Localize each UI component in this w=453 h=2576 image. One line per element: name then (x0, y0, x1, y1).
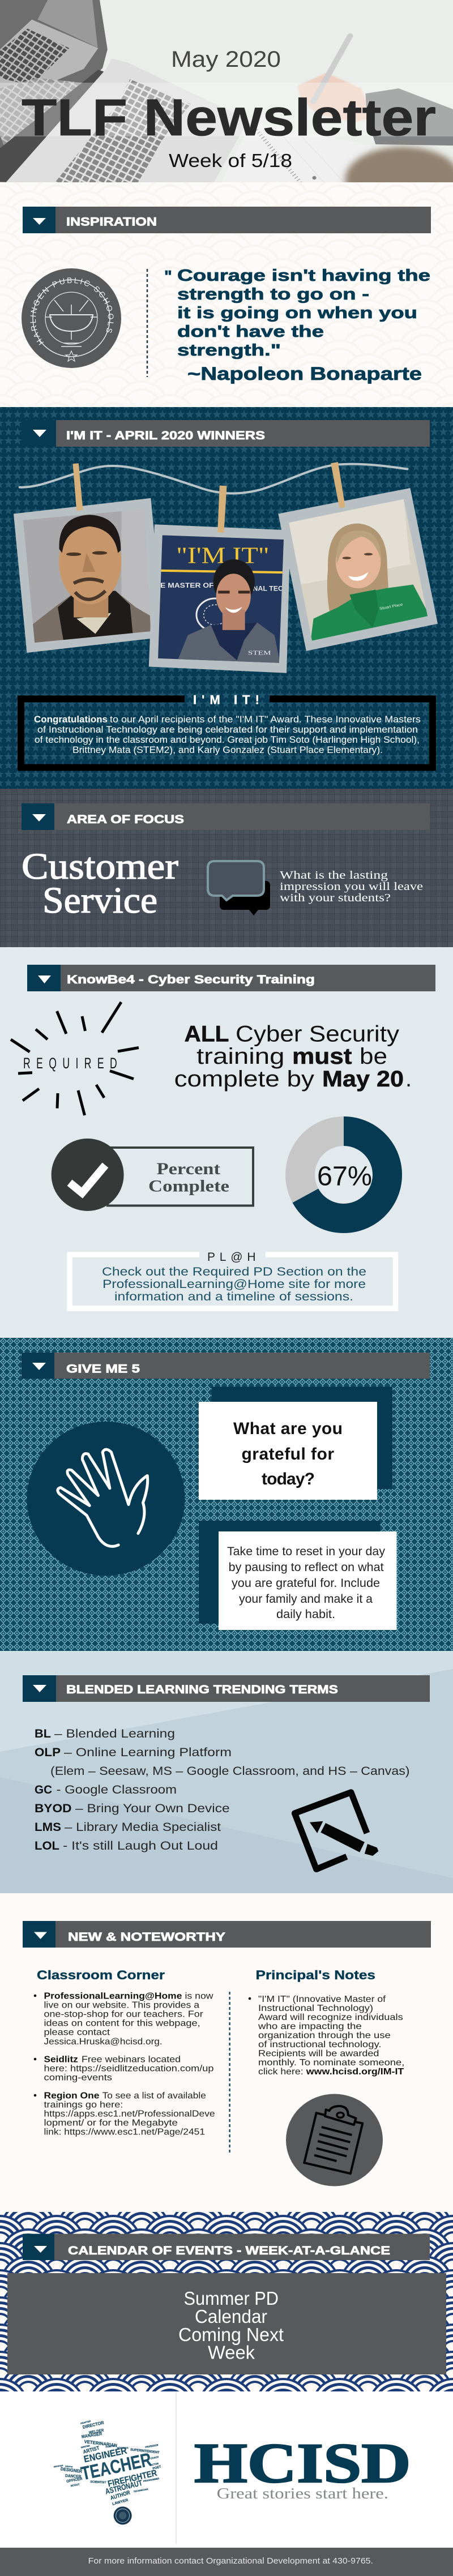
panel: area of focus (0, 789, 453, 947)
section heading: area of focus: AREA OF FOCUS (67, 813, 184, 826)
Texas word cloud: WRITER (81, 2445, 91, 2449)
bullet list: please contact (44, 2028, 110, 2038)
bullet list: https://apps.esc1.net/ProfessionalDeve (44, 2109, 215, 2119)
deadline statement: must (292, 1044, 352, 1069)
glossary list: (Elem – Seesaw, MS – Google Classroom, and HS – Canvas) (50, 1765, 410, 1778)
bullet list: is now (185, 1991, 213, 2001)
glossary list: LMS (35, 1821, 61, 1834)
glossary list: – Blended Learning (54, 1727, 175, 1740)
Texas word cloud: ASTRONAUT (104, 2478, 143, 2496)
quote: strength." (177, 341, 281, 360)
callout body: Congratulations (34, 714, 108, 725)
quote: don't have the (177, 323, 324, 341)
divider (147, 269, 148, 377)
deadline statement: be (360, 1044, 387, 1069)
Texas word cloud: COACH (150, 2455, 159, 2460)
Texas word cloud: ACTOR (150, 2462, 159, 2467)
section heading: area of focus (22, 803, 430, 830)
bullet list: link: https://www.esc1.net/Page/2451 (44, 2128, 205, 2137)
calendar message box: Week (208, 2342, 255, 2363)
callout: PL@H: information and a timeline of sessions. (114, 1290, 353, 1303)
callout: I'M IT award text (21, 693, 433, 768)
quote: it is going on when you (177, 304, 417, 322)
deadline statement: ALL (185, 1021, 229, 1046)
bullet list: lopment/ or for the Megabyte (44, 2119, 178, 2128)
glossary list: GC (35, 1783, 52, 1796)
callout body: of Instructional Technology are being celebrated for their support and implementation (37, 724, 418, 735)
card: gratitude advice: by pausing to reflect on what (229, 1561, 384, 1574)
Texas word cloud: SURVEYOR (65, 2465, 73, 2468)
Texas word cloud: DIRECTOR (82, 2420, 105, 2430)
focus title: Customer (22, 846, 178, 887)
Texas word cloud: LAWYER (112, 2498, 129, 2506)
note text: of instructional technology. (258, 2040, 382, 2049)
section heading: new and noteworthy (23, 1921, 431, 1948)
divider (176, 2391, 177, 2544)
deadline statement: training (196, 1044, 284, 1069)
bullet list: ProfessionalLearning@Home (44, 1991, 182, 2001)
deadline statement: complete by (174, 1067, 314, 1092)
callout body: of technology in the classroom and beyond. Great job Tim Soto (Harlingen High School), (35, 734, 420, 745)
translucent band (0, 83, 453, 136)
photo: Brittney Mata: STEM (248, 650, 271, 656)
card: gratitude advice: you are grateful for. Include (232, 1577, 380, 1590)
section heading: give me 5 (22, 1353, 430, 1379)
calendar message box: Summer PD (183, 2288, 279, 2309)
panel: calendar of events (0, 2212, 453, 2391)
bullet list: here: https://seidlitzeducation.com/up (44, 2064, 214, 2074)
bullet list: Seidlitz (44, 2055, 78, 2064)
card: gratitude question (199, 1387, 392, 1500)
note text: www.hcisd.org/IM-IT (306, 2067, 404, 2077)
date line: May 2020 (171, 47, 281, 72)
Texas word cloud: PROGRAMMER (143, 2477, 159, 2483)
photo: Brittney Mata: "I'M IT" (176, 542, 270, 568)
card: gratitude advice: your family and make it a (239, 1593, 373, 1606)
icon: hand (27, 1422, 185, 1576)
calendar message box: Calendar (195, 2306, 267, 2327)
callout body (34, 714, 421, 755)
panel: I'm IT April 2020 winners (0, 407, 453, 789)
photo: Tim Soto (14, 463, 164, 653)
glossary list: LOL (35, 1839, 59, 1852)
section heading: I'm IT (23, 420, 430, 447)
panel: give me 5 (0, 1338, 453, 1651)
glossary list: OLP (35, 1746, 61, 1759)
header photo banner (0, 0, 453, 182)
footer contact bar: For more information contact Organizational Development at 430-9765. (88, 2556, 373, 2566)
deadline statement (174, 1021, 412, 1092)
glossary list (35, 1727, 410, 1852)
required burst (11, 1002, 139, 1115)
required burst: REQUIRED (23, 1054, 117, 1072)
percent complete label (52, 1139, 253, 1211)
HCISD logo: HCISD (194, 2432, 411, 2494)
Texas word cloud: DANCER (65, 2473, 82, 2479)
callout body: Brittney Mata (STEM2), and Karly Gonzalez (Stuart Place Elementary). (72, 744, 383, 755)
callout: PL@H: Check out the Required PD Section on the (102, 1265, 366, 1278)
column: classroom corner: Classroom Corner (37, 1968, 165, 1982)
section heading: KnowBe4 (27, 965, 435, 991)
column: principal's notes (249, 1968, 404, 2077)
quote: Courage isn't having the (177, 267, 430, 285)
glossary list: - It's still Laugh Out Loud (63, 1839, 218, 1852)
bullet list (34, 1991, 215, 2137)
bullet list: Jessica.Hruska@hcisd.org. (44, 2037, 163, 2047)
Texas word cloud: POET (152, 2465, 162, 2471)
bullet list: coming-events (44, 2073, 112, 2083)
Texas word cloud: ENGINEER (83, 2445, 128, 2464)
quote: ~Napoleon Bonaparte (187, 363, 422, 384)
note text: "I'M IT" (Innovative Master of (258, 1995, 386, 2004)
photo: Brittney Mata: E MASTER OF I (160, 582, 218, 589)
Texas word cloud: PRAFTER (80, 2420, 91, 2425)
Texas word cloud: VETERINARIAN (84, 2439, 118, 2448)
section heading: I'm IT: I'M IT - APRIL 2020 WINNERS (66, 429, 265, 442)
focus question: What is the lasting (280, 869, 388, 882)
panel: KnowBe4 cyber security training (0, 947, 453, 1338)
deadline statement: May 20 (322, 1067, 404, 1092)
glossary list: – Online Learning Platform (64, 1746, 232, 1759)
panel: new and noteworthy (0, 1893, 453, 2212)
glossary list: BYOD (35, 1802, 71, 1815)
Texas word cloud: ENTREPRENEUR (117, 2447, 129, 2449)
donut chart: 67 percent: 67% (317, 1162, 372, 1192)
Texas word cloud: DESIGNER (60, 2466, 83, 2474)
callout heading: I'M IT! (193, 693, 259, 707)
Texas word cloud: AUTHOR (110, 2489, 131, 2502)
bullet list: ideas on content for this webpage, (44, 2019, 200, 2029)
section heading: blended learning: BLENDED LEARNING TRENDING TERMS (66, 1683, 338, 1696)
bullet list: Free webinars located (82, 2055, 181, 2064)
Texas word cloud: FIREFIGHTER (107, 2468, 158, 2489)
card: gratitude advice (199, 1521, 396, 1630)
glossary list: BL (35, 1727, 51, 1740)
focus title: Service (42, 880, 157, 921)
card: gratitude question: grateful for (241, 1445, 334, 1464)
glossary list: - Google Classroom (57, 1783, 177, 1796)
Texas word cloud: PROFESSOR (145, 2444, 159, 2449)
note text: organization through the use (258, 2031, 391, 2040)
icon: pencil in square (294, 1792, 378, 1869)
card: gratitude advice: Take time to reset in your day (227, 1545, 386, 1558)
section heading: give me 5: GIVE ME 5 (66, 1363, 140, 1376)
focus title (22, 846, 178, 921)
bullet list: live on our website. This provides a (44, 2001, 199, 2010)
week line: Week of 5/18 (169, 150, 292, 171)
panel: inspiration (0, 182, 453, 407)
note text: Instructional Technology) (258, 2004, 373, 2013)
card: gratitude question: What are you (233, 1419, 343, 1438)
Texas word cloud: ARTIST (83, 2445, 100, 2455)
clothespin (331, 462, 345, 508)
section heading: calendar: CALENDAR OF EVENTS - WEEK-AT-A-GLANCE (68, 2244, 390, 2257)
column: principal's notes: Principal's Notes (256, 1968, 375, 1982)
focus question: impression you will leave (280, 880, 423, 893)
icon: small district seal (114, 2506, 132, 2524)
card: gratitude question: today? (262, 1470, 315, 1488)
section heading: inspiration: INSPIRATION (66, 215, 157, 229)
photo: Karly Gonzalez: Stuart Place (379, 602, 403, 611)
callout: PL@H: ProfessionalLearning@Home site for more (102, 1278, 366, 1291)
Texas word cloud: SUPERINTENDENT (130, 2448, 160, 2455)
photo clothesline and portraits (14, 462, 438, 673)
section heading: calendar (23, 2234, 430, 2260)
Texas word cloud (54, 2420, 162, 2524)
bullet list: Region One (44, 2091, 100, 2100)
callout: PL@H (70, 1251, 395, 1308)
calendar message box: Coming Next (178, 2324, 284, 2345)
card: gratitude advice: daily habit. (276, 1608, 335, 1621)
Texas word cloud: WELDER (88, 2428, 105, 2435)
percent complete label: Percent (156, 1159, 220, 1178)
focus question: with your students? (280, 892, 391, 904)
note text: Recipients will be awarded (258, 2049, 379, 2059)
icon: Harlingen Public Schools seal: HARLINGEN PUBLIC SCHOOLS (31, 277, 114, 345)
photo: Brittney Mata: NAL TEC (253, 585, 283, 592)
Texas word cloud: SCIENTIST (90, 2480, 107, 2485)
string (20, 464, 407, 494)
Texas word cloud: MANAGER (81, 2431, 102, 2440)
bullet list: one-stop-shop for our teachers. For (44, 2010, 203, 2019)
note text: click here: (258, 2067, 304, 2077)
deadline statement: . (405, 1067, 412, 1092)
photo: Brittney Mata (149, 485, 290, 673)
quote: " (164, 268, 172, 286)
clothespin (217, 485, 227, 533)
panel: blended learning trending terms (0, 1651, 453, 1893)
note text: who are impacting the (258, 2022, 362, 2031)
section heading: inspiration (23, 207, 431, 233)
photo: Karly Gonzalez (278, 462, 438, 651)
Texas word cloud: OFFICER (66, 2477, 83, 2484)
title: TLF Newsletter (22, 89, 436, 147)
Texas word cloud: SCOUT (70, 2483, 80, 2487)
note text: Award will recognize individuals (258, 2013, 403, 2022)
bullet list: trainings go here: (44, 2100, 123, 2109)
icon: clipboard (286, 2094, 383, 2186)
Texas word cloud: REPORTER (54, 2464, 63, 2468)
divider (229, 1992, 230, 2153)
column: classroom corner (34, 1968, 215, 2137)
callout: PL@H: PL@H (207, 1251, 256, 1264)
panel: footer logos (0, 2391, 453, 2548)
icon: Harlingen Public Schools seal (22, 268, 121, 368)
footer contact bar (0, 2548, 453, 2576)
note text (249, 1995, 404, 2077)
donut chart: 67 percent (300, 1131, 387, 1218)
bullet list: To see a list of available (102, 2091, 206, 2100)
clothespin (73, 463, 83, 511)
section heading: blended learning (23, 1675, 430, 1702)
Texas word cloud: TECHNICIAN (133, 2488, 148, 2493)
icon: speech bubbles (208, 861, 270, 915)
photo: laptops and writing hand (0, 0, 453, 182)
glossary list: – Library Media Specialist (65, 1821, 221, 1834)
calendar message box (7, 2273, 446, 2374)
glossary list: – Bring Your Own Device (75, 1802, 230, 1815)
callout body: to our April recipients of the "I'M IT" Award. These Innovative Masters (110, 714, 421, 725)
quote (164, 267, 430, 384)
HCISD logo: Great stories start here. (217, 2485, 388, 2502)
percent complete label: Complete (148, 1177, 229, 1196)
note text: monthly. To nominate someone, (258, 2058, 404, 2068)
section heading: new and noteworthy: NEW & NOTEWORTHY (68, 1931, 225, 1944)
section heading: KnowBe4: KnowBe4 - Cyber Security Training (67, 973, 315, 986)
quote: strength to go on - (177, 285, 369, 303)
focus question (280, 869, 423, 904)
Texas word cloud: PROMOTER (105, 2445, 116, 2448)
Texas word cloud: TEACHER (79, 2449, 153, 2484)
deadline statement: Cyber Security (236, 1021, 399, 1046)
